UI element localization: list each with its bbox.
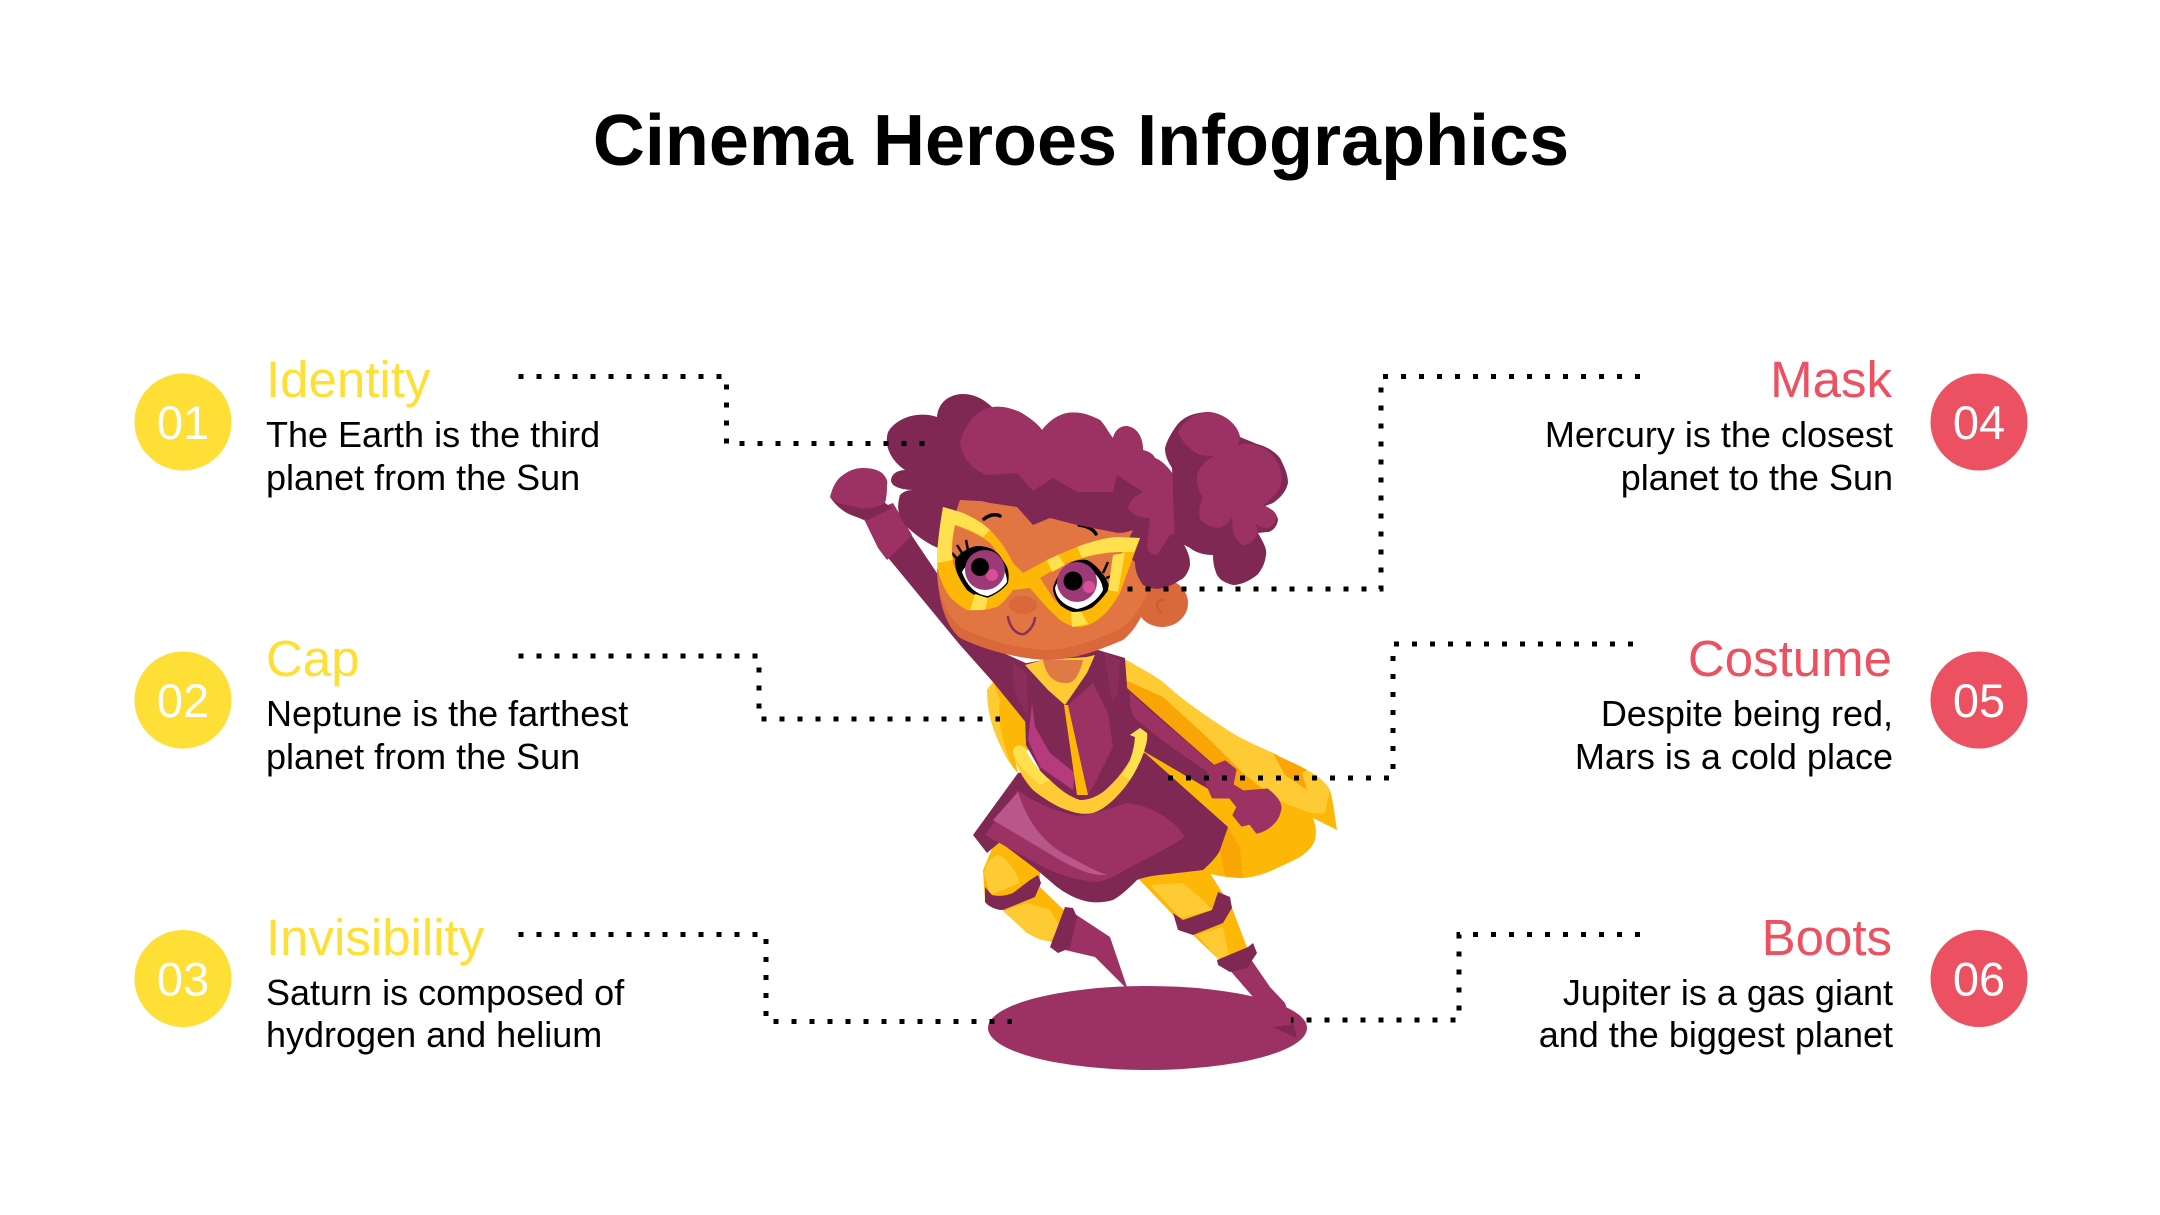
description costume: Mars is a cold place (1575, 736, 1893, 777)
number badge 03 (134, 930, 232, 1027)
number badge 01: 01 (157, 396, 209, 449)
description invisibility: Saturn is composed of (266, 972, 625, 1013)
heading costume: Costume (1688, 630, 1892, 687)
number badge 06: 06 (1953, 952, 2005, 1006)
description cap: planet from the Sun (266, 736, 580, 777)
skirt (973, 753, 1228, 902)
right arm (1118, 680, 1220, 790)
illustration: superhero girl (830, 394, 1337, 1070)
description cap: Neptune is the farthest (266, 693, 628, 734)
connector: costume (1168, 644, 1633, 778)
hair front (953, 407, 1192, 589)
title: Cinema Heroes Infographics (593, 101, 1569, 181)
connector: cap (518, 656, 1000, 719)
number badge 04: 04 (1953, 396, 2005, 449)
heading boots: Boots (1762, 909, 1892, 966)
description mask: planet to the Sun (1621, 457, 1893, 498)
description boots: Jupiter is a gas giant (1563, 972, 1893, 1013)
description mask: Mercury is the closest (1545, 414, 1893, 455)
back hair (887, 394, 1000, 550)
number badge 02: 02 (157, 674, 209, 727)
item 04: mask (1545, 351, 2028, 498)
number badge 01 (134, 374, 232, 470)
belt (1013, 728, 1147, 814)
number badge 05 (1930, 652, 2028, 748)
face (937, 500, 1150, 660)
connector: identity (518, 376, 925, 444)
heading identity: Identity (266, 351, 431, 408)
number badge 02 (134, 652, 232, 748)
glove (1207, 762, 1280, 832)
nose and mouth (1008, 596, 1037, 634)
mask (937, 507, 1140, 627)
left eye (952, 540, 1010, 599)
raised arm (880, 530, 1032, 730)
number badge 04 (1930, 374, 2028, 470)
description identity: The Earth is the third (266, 414, 600, 455)
right eye (1053, 560, 1115, 613)
connector: boots (1291, 934, 1640, 1020)
item 05: costume (1575, 630, 2028, 777)
heading mask: Mask (1770, 351, 1892, 408)
connector: invisibility (518, 934, 1012, 1022)
right ear (1136, 579, 1188, 627)
number badge 05: 05 (1953, 674, 2005, 727)
number badge 06 (1930, 930, 2028, 1027)
legs (983, 835, 1248, 965)
shadow ellipse (988, 986, 1307, 1070)
description identity: planet from the Sun (266, 457, 580, 498)
description invisibility: hydrogen and helium (266, 1014, 602, 1055)
heading invisibility: Invisibility (266, 909, 485, 966)
boots (1050, 907, 1297, 1038)
right hair bun (1165, 412, 1288, 585)
raised fist and cuff (830, 468, 912, 560)
torso (1000, 650, 1145, 800)
cape (987, 658, 1337, 878)
heading cap: Cap (266, 630, 360, 687)
description boots: and the biggest planet (1539, 1014, 1893, 1055)
item 01: identity (134, 351, 600, 498)
description costume: Despite being red, (1601, 693, 1893, 734)
number badge 03: 03 (157, 952, 209, 1006)
item 02: cap (134, 630, 628, 777)
connector: mask (1122, 376, 1640, 589)
neck and collar (1025, 655, 1095, 795)
item 03: invisibility (134, 909, 625, 1055)
item 06: boots (1539, 909, 2028, 1055)
